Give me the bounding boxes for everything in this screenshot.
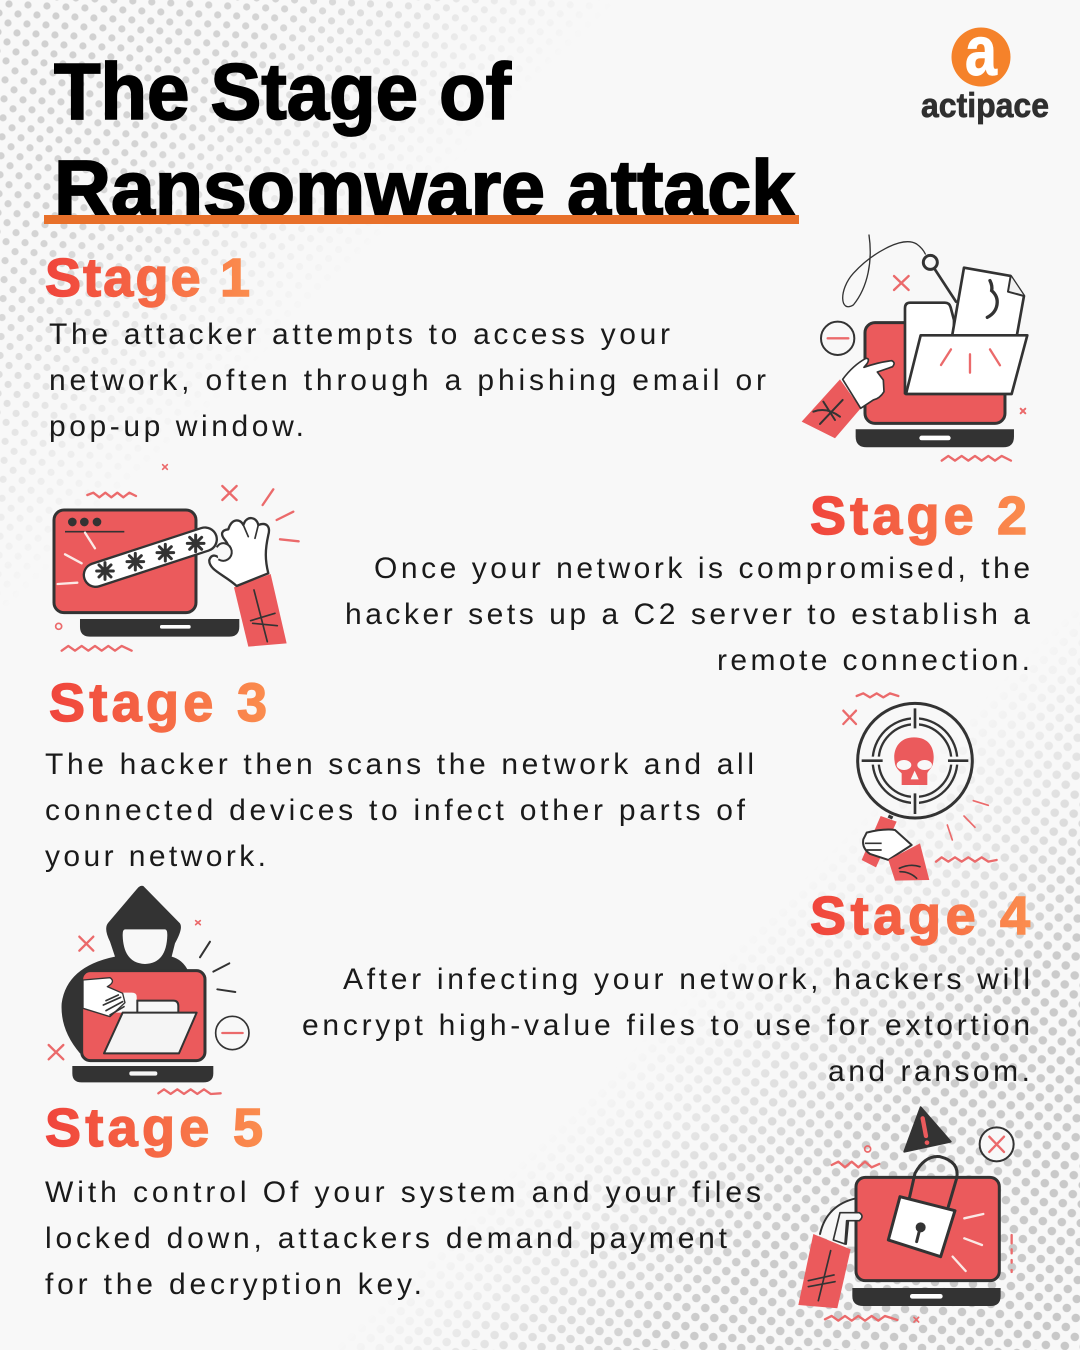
stage 4 heading: Stage 4 <box>810 886 1030 946</box>
stage 2 text: hacker sets up a C2 server to establish a <box>345 598 1030 631</box>
stage 4 text: and ransom. <box>828 1055 1030 1088</box>
stage 2 text: remote connection. <box>717 644 1030 677</box>
icon: padlock on laptop <box>798 1107 1014 1322</box>
icon: skull target magnifier <box>843 693 997 881</box>
icon: hooded hacker with folder <box>49 886 249 1094</box>
title: The Stage of <box>54 47 511 136</box>
logo: actipace: a <box>965 12 997 90</box>
stage 1 heading: Stage 1 <box>45 248 250 308</box>
stage 3 heading: Stage 3 <box>49 673 267 733</box>
stage 4 text: After infecting your network, hackers will <box>343 963 1030 996</box>
logo: actipace <box>921 12 1049 125</box>
title <box>54 47 795 233</box>
stage 3 text: The hacker then scans the network and all <box>45 748 754 781</box>
stage 5 text: locked down, attackers demand payment <box>45 1222 728 1255</box>
stage 2 heading: Stage 2 <box>810 486 1027 546</box>
stage 5 text: With control Of your system and your files <box>45 1176 761 1209</box>
title: Ransomware attack <box>54 144 795 233</box>
logo: actipace: actipace <box>921 87 1049 125</box>
stage 3 text <box>45 748 754 873</box>
stage 4 text <box>302 963 1030 1088</box>
stage 4 text: encrypt high-value files to use for extortion <box>302 1009 1030 1042</box>
stage 5 text: for the decryption key. <box>45 1268 422 1301</box>
icon: phishing hook and folder on laptop <box>802 235 1027 461</box>
stage 2 text <box>345 552 1030 677</box>
icon: password on laptop <box>54 465 299 651</box>
stage 1 text: network, often through a phishing email or <box>49 364 766 397</box>
stage 5 text <box>45 1176 761 1301</box>
stage 3 text: your network. <box>45 840 266 873</box>
stage 1 text: The attacker attempts to access your <box>49 318 670 351</box>
stage 5 heading: Stage 5 <box>45 1098 263 1158</box>
stage 3 text: connected devices to infect other parts of <box>45 794 746 827</box>
stage 2 text: Once your network is compromised, the <box>374 552 1030 585</box>
stage 1 text <box>49 318 766 443</box>
title underline <box>44 215 799 224</box>
stage 1 text: pop-up window. <box>49 410 304 443</box>
